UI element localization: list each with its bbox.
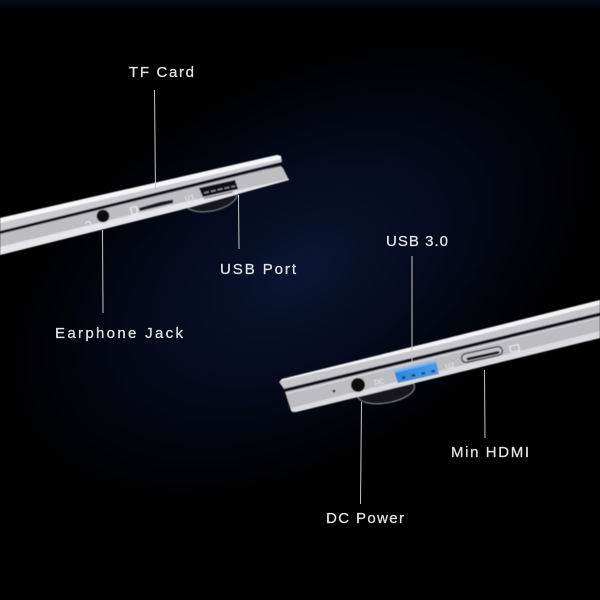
label: Earphone Jack: Earphone Jack	[55, 325, 184, 342]
label: TF Card: TF Card	[129, 64, 194, 81]
label: Min HDMI	[451, 370, 529, 461]
label: Min HDMI: Min HDMI	[451, 444, 529, 461]
LED indicator	[333, 390, 335, 392]
USB port	[184, 180, 238, 203]
laptop: right side view	[279, 300, 600, 412]
lid: right laptop	[279, 300, 600, 389]
base: left laptop	[0, 166, 289, 255]
label: Earphone Jack	[55, 230, 184, 342]
label: USB Port	[220, 195, 297, 278]
earphone jack	[86, 210, 109, 224]
Mini HDMI port	[466, 345, 520, 359]
label: USB 3.0	[386, 233, 448, 364]
stand: left laptop	[182, 180, 240, 216]
label: TF Card	[129, 64, 194, 192]
TF card slot	[130, 200, 173, 215]
hinge gap: left laptop	[0, 162, 281, 234]
label: USB Port: USB Port	[220, 261, 297, 278]
DC power jack: DC	[374, 378, 385, 387]
label: DC Power	[326, 402, 404, 527]
hinge gap: right laptop	[283, 312, 600, 392]
label: USB 3.0: USB 3.0	[386, 233, 448, 250]
DC power jack	[351, 378, 385, 392]
lid: left laptop	[0, 155, 282, 232]
USB 3.0 port	[394, 361, 455, 383]
label: DC Power: DC Power	[326, 510, 404, 527]
USB port: U1	[184, 194, 196, 203]
stand: right laptop	[355, 374, 417, 408]
base: right laptop	[285, 316, 600, 412]
laptop: left side view	[0, 155, 289, 255]
USB 3.0 port: U2	[445, 362, 455, 371]
